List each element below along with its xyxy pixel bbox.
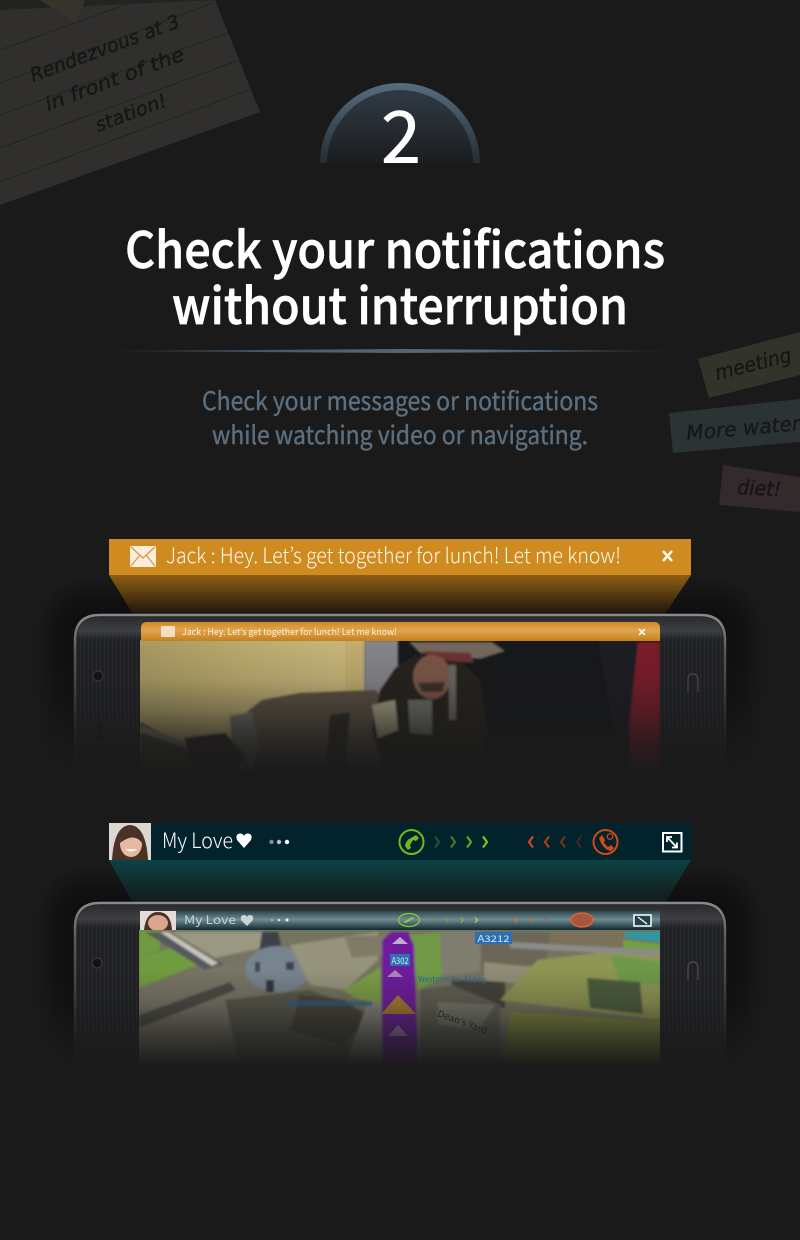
screen fade to background xyxy=(30,970,770,1074)
map label: Dean's Yard: Dean's Yard xyxy=(436,1007,489,1037)
screen notification bar: Jack : Hey. Let’s get together for lunch! Let me know! xyxy=(182,625,397,638)
phone shadows xyxy=(39,579,761,1067)
number badge: 2 xyxy=(381,79,421,184)
subtitle xyxy=(202,382,598,452)
screen fade to background xyxy=(30,640,770,782)
icon: decline call xyxy=(594,830,618,854)
pagination dots xyxy=(269,840,289,844)
contact photo xyxy=(109,823,151,860)
contact banner: teal: My Love xyxy=(162,825,233,855)
video frame: pirate scene xyxy=(140,640,660,775)
icon: answer call xyxy=(400,830,424,854)
road sign A302: A302 xyxy=(392,954,408,967)
subtitle: Check your messages or notifications xyxy=(202,382,598,418)
icon: expand xyxy=(663,833,682,852)
road sign A3212 xyxy=(475,932,512,945)
phone body xyxy=(75,615,725,780)
title: Check your notifications xyxy=(125,211,665,283)
sticky tags: More water xyxy=(685,411,800,445)
icon: envelope xyxy=(130,546,156,567)
icon: heart xyxy=(236,834,252,848)
sticky tags: meeting xyxy=(712,343,794,385)
title xyxy=(125,211,665,339)
sticky note: rendezvous: Rendezvous at 3 xyxy=(27,11,183,87)
notification banner: amber: Jack : Hey. Let’s get together for lunch! Let me know! xyxy=(166,540,621,570)
contact banner: teal xyxy=(109,823,691,903)
screen contact bar: My Love xyxy=(184,912,236,928)
sticky tags xyxy=(669,332,800,512)
sticky note: rendezvous xyxy=(0,0,260,205)
phone 1: video playback xyxy=(30,615,770,782)
notification banner: amber xyxy=(109,539,691,614)
map view xyxy=(139,930,660,1066)
screen notification bar xyxy=(141,622,660,641)
title: without interruption xyxy=(172,267,628,339)
chevrons: accept xyxy=(435,836,487,848)
subtitle: while watching video or navigating. xyxy=(212,416,588,452)
number badge xyxy=(320,83,480,163)
phone 2: navigation xyxy=(66,902,733,1067)
title divider xyxy=(117,349,670,353)
phone body xyxy=(75,903,725,1070)
sticky note: rendezvous: station! xyxy=(92,90,170,137)
sticky note: rendezvous: in front of the xyxy=(42,44,187,116)
sticky tags: diet! xyxy=(737,475,782,501)
chevrons: decline xyxy=(529,836,581,848)
road sign A3212: A3212 xyxy=(478,932,510,945)
screen contact bar xyxy=(140,911,660,931)
map label: Westminster Abbey: Westminster Abbey xyxy=(418,974,487,985)
